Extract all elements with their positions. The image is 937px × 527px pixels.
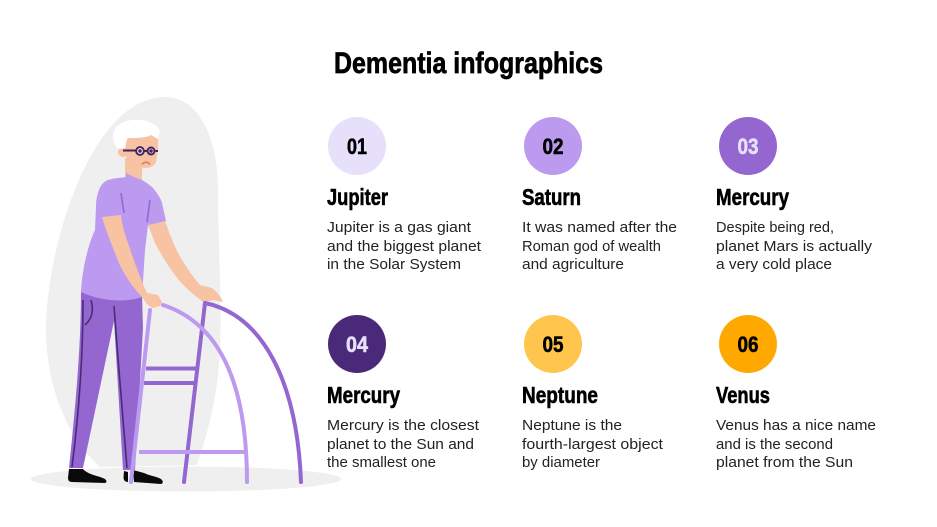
text Venus: Venus has a nice name (716, 417, 876, 434)
front arm (102, 215, 162, 308)
item 05: Neptune (522, 315, 664, 471)
text Neptune: Neptune is the (522, 417, 622, 434)
text Jupiter: in the Solar System (327, 256, 461, 273)
shoes (68, 469, 163, 484)
text Mercury: Mercury is the closest (327, 417, 480, 434)
item 01: Jupiter (327, 117, 482, 273)
text Mercury (716, 219, 873, 273)
heading Neptune: Neptune (522, 382, 598, 408)
item 02: Saturn (522, 117, 677, 273)
heading Mercury: Mercury (327, 382, 400, 408)
item 03: Mercury (716, 117, 873, 273)
text Saturn (522, 219, 677, 273)
badge 05: 05 (542, 332, 564, 357)
text Venus (716, 417, 876, 471)
badge 06 (719, 315, 777, 373)
text Mercury: Despite being red, (716, 219, 834, 236)
glasses (123, 147, 158, 155)
badge 04: 04 (346, 332, 369, 357)
text Jupiter (327, 219, 482, 273)
text Mercury (327, 417, 480, 471)
text Venus: planet from the Sun (716, 454, 853, 471)
text Saturn: and agriculture (522, 256, 624, 273)
text Mercury: the smallest one (327, 454, 436, 471)
badge 03 (719, 117, 777, 175)
neck (125, 158, 142, 182)
badge 02: 02 (542, 134, 564, 159)
text Neptune (522, 417, 664, 471)
text Mercury: planet Mars is actually (716, 238, 873, 255)
background blob (46, 97, 221, 467)
ground shadow (31, 466, 341, 492)
walker (131, 303, 301, 482)
shirt (81, 173, 166, 300)
text Mercury: a very cold place (716, 256, 832, 273)
text Jupiter: and the biggest planet (327, 238, 482, 255)
heading Venus: Venus (716, 382, 770, 408)
title: Dementia infographics (334, 47, 603, 80)
heading Mercury: Mercury (716, 184, 789, 210)
head (113, 120, 160, 168)
item 04: Mercury (327, 315, 480, 471)
badge 01 (328, 117, 386, 175)
badge 03: 03 (738, 134, 758, 159)
badge 04 (328, 315, 386, 373)
text Venus: and is the second (716, 436, 833, 453)
text Neptune: by diameter (522, 454, 600, 471)
item 06: Venus (716, 315, 876, 471)
back arm (148, 221, 223, 302)
text Saturn: It was named after the (522, 219, 677, 236)
text Saturn: Roman god of wealth (522, 238, 661, 255)
text Neptune: fourth-largest object (522, 436, 664, 453)
text Mercury: planet to the Sun and (327, 436, 474, 453)
text Jupiter: Jupiter is a gas giant (327, 219, 472, 236)
trousers (69, 290, 143, 470)
badge 02 (524, 117, 582, 175)
badge 06: 06 (738, 332, 758, 357)
badge 05 (524, 315, 582, 373)
heading Jupiter: Jupiter (327, 184, 388, 210)
illustration: elderly person with walker (31, 97, 341, 492)
heading Saturn: Saturn (522, 184, 581, 210)
badge 01: 01 (347, 134, 367, 159)
